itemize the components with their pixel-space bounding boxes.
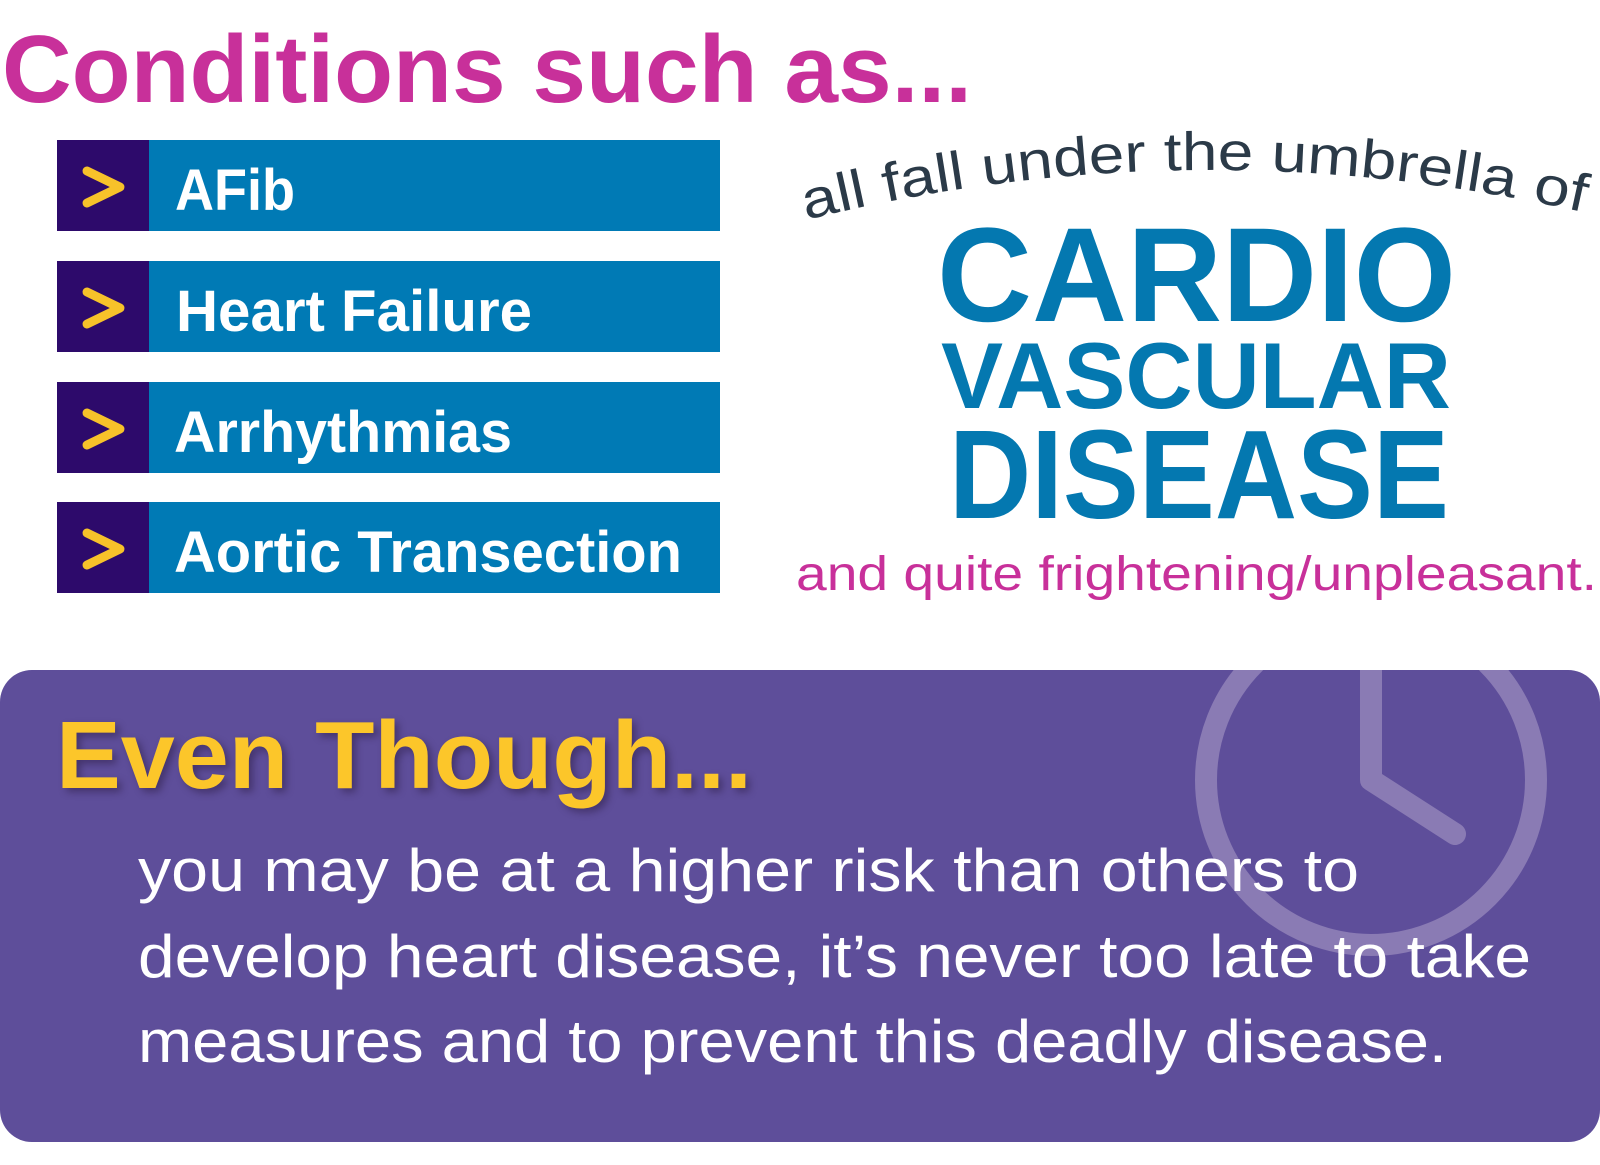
- list item: Heart Failure: [57, 261, 720, 352]
- body text: develop heart disease, it’s never too late to take: [138, 923, 1531, 990]
- heading: cardiovascular disease: DISEASE: [949, 404, 1449, 545]
- subtext: and quite frightening/unpleasant.: [796, 548, 1597, 601]
- panel heading: Even Though...: [56, 702, 752, 809]
- list item: Arrhythmias: [57, 382, 720, 473]
- icon: chevron: [87, 413, 120, 445]
- body text: measures and to prevent this deadly disease.: [138, 1008, 1447, 1075]
- body text: you may be at a higher risk than others to: [138, 837, 1359, 904]
- heading: cardiovascular disease: [937, 201, 1456, 545]
- icon: chevron: [87, 292, 120, 324]
- panel: even though: [0, 670, 1600, 1142]
- arched text: all fall under the umbrella of: [805, 130, 1592, 218]
- heading: cardiovascular disease: CARDIO: [937, 201, 1456, 350]
- list item: Aortic Transection: [57, 502, 720, 593]
- icon: clock: [1195, 670, 1547, 956]
- list item: AFib: AFib: [175, 158, 295, 223]
- icon: chevron: [87, 533, 120, 565]
- icon: chevron: [87, 171, 120, 203]
- panel heading: Even Though...: [60, 706, 756, 813]
- list item: Heart Failure: Heart Failure: [176, 279, 532, 344]
- heading: cardiovascular disease: VASCULAR: [941, 323, 1451, 428]
- list item: Arrhythmias: Arrhythmias: [174, 400, 512, 465]
- list item: AFib: [57, 140, 720, 231]
- title: Conditions such as...: [2, 16, 972, 123]
- body text: [138, 837, 1531, 1075]
- list item: Aortic Transection: Aortic Transection: [174, 520, 682, 585]
